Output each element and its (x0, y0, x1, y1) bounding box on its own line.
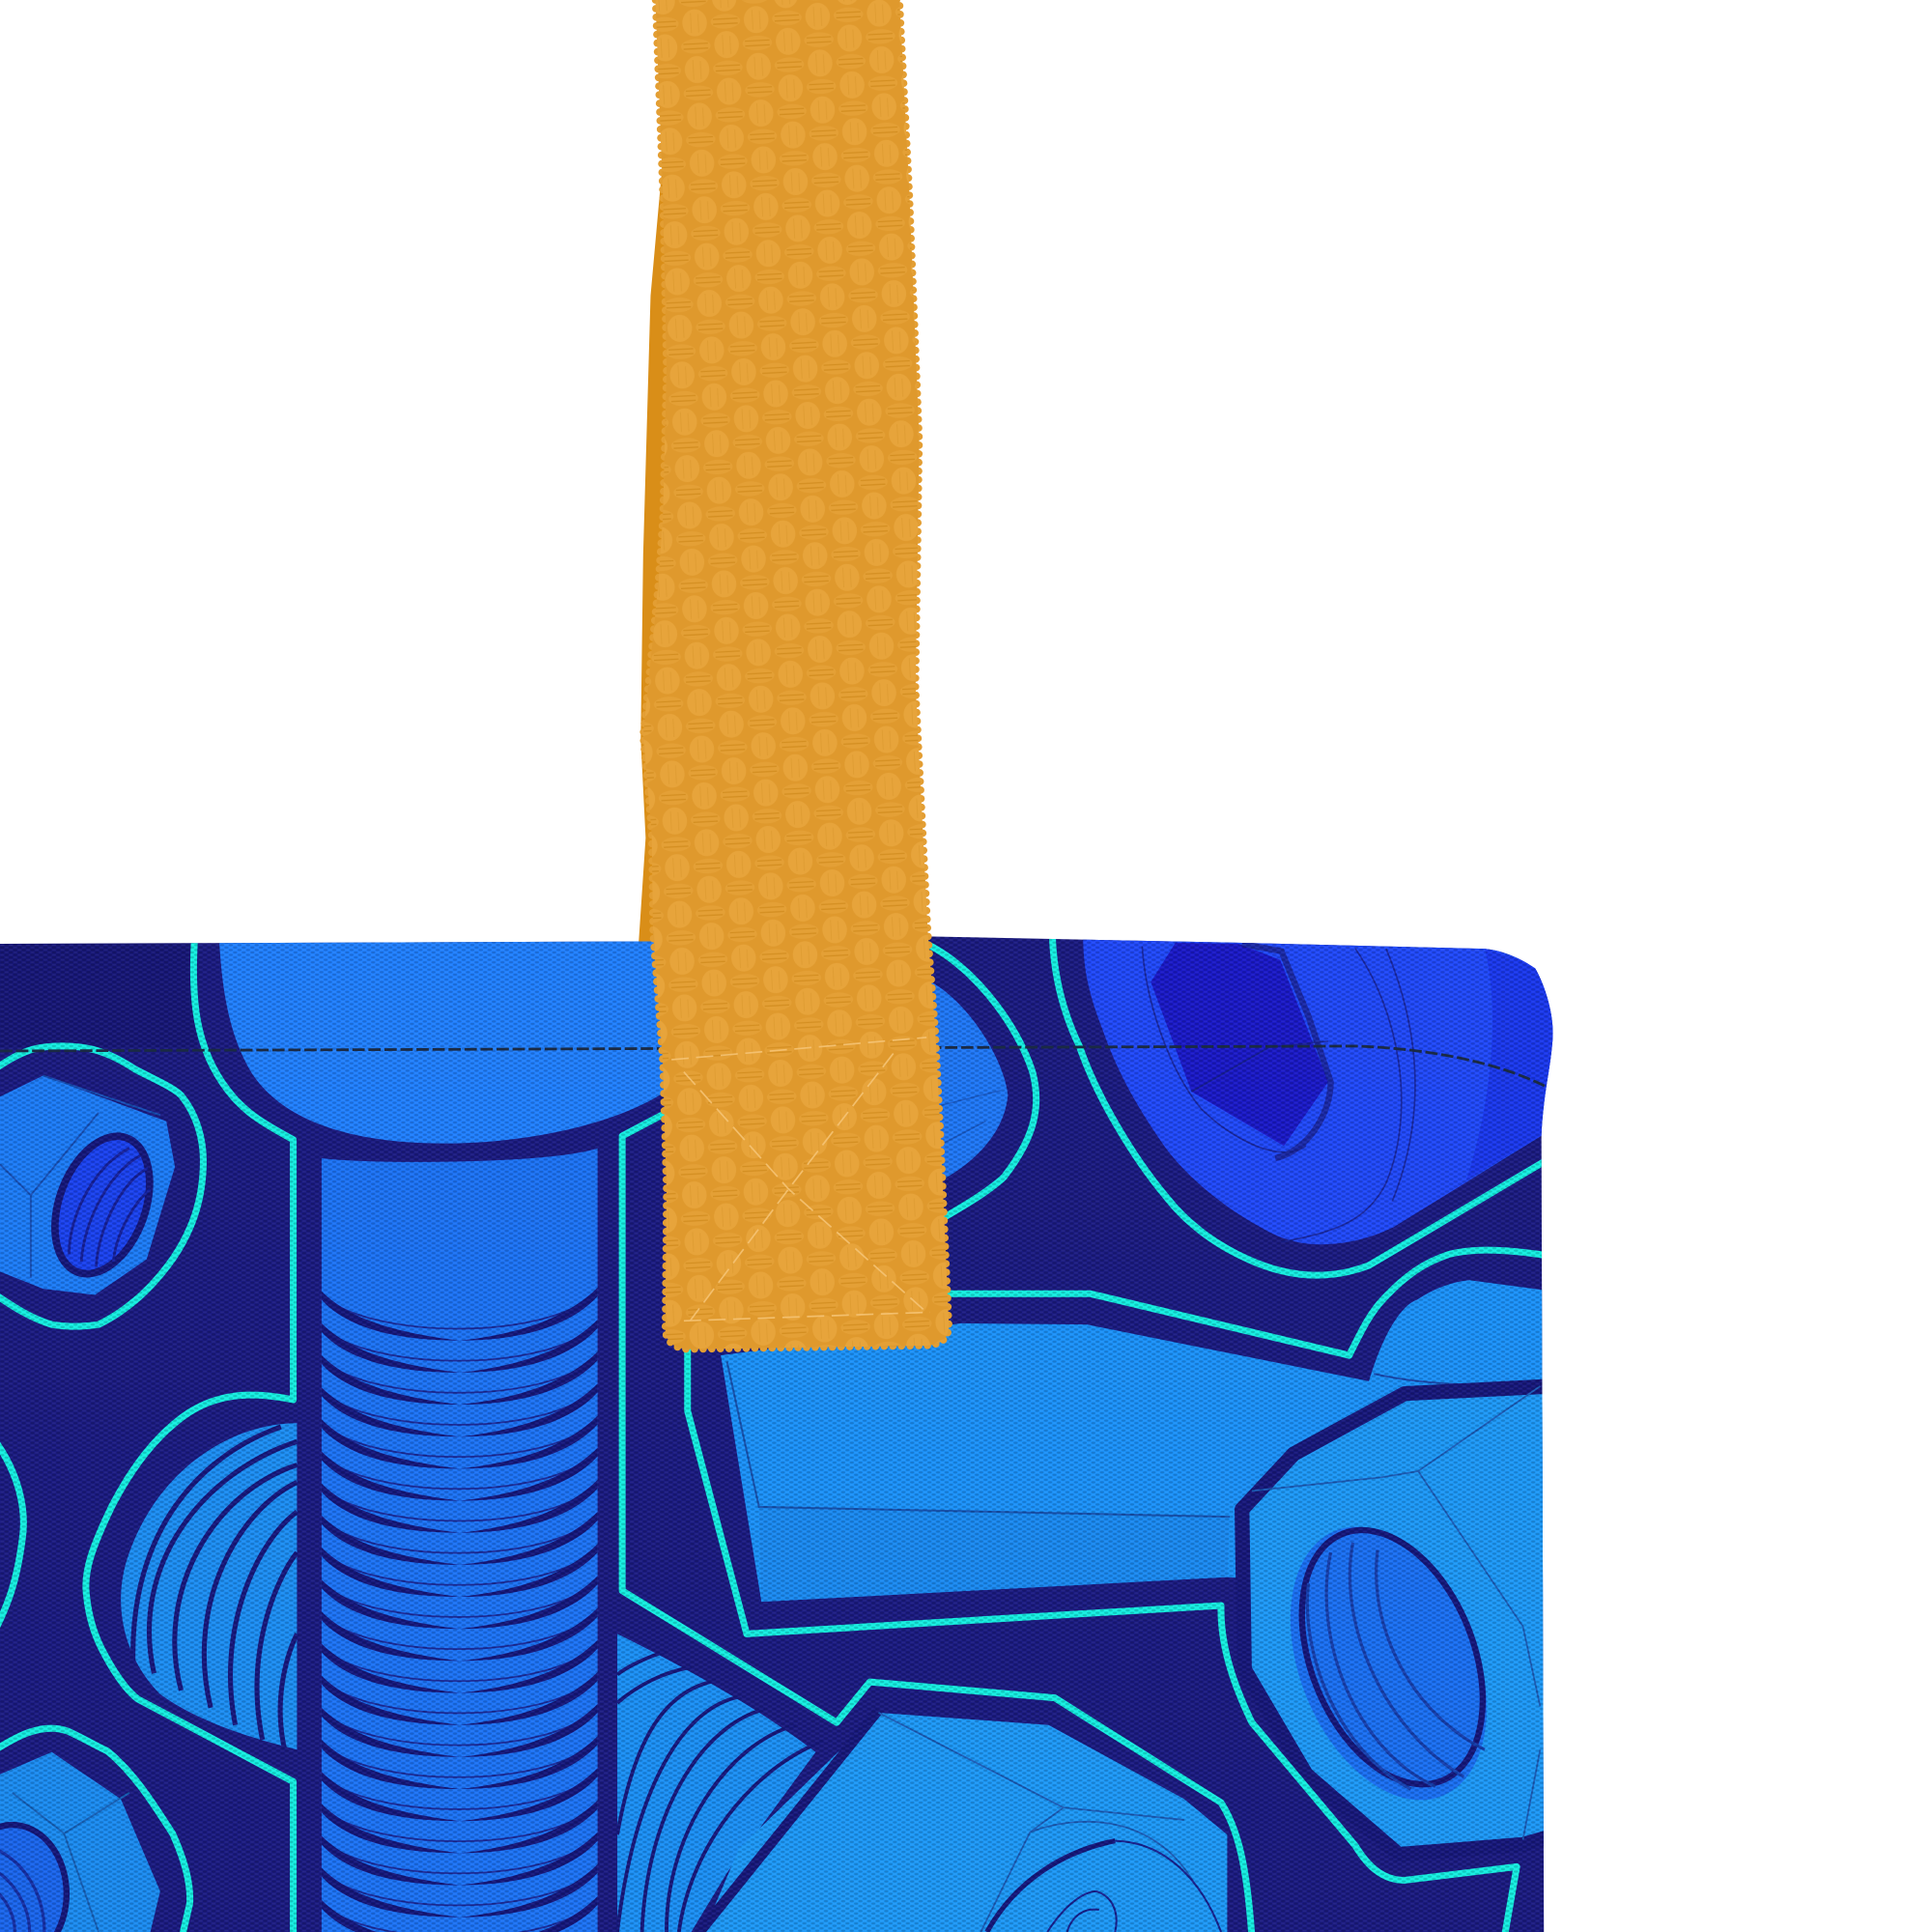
main strap (643, 0, 949, 1350)
large hex nut, right (1242, 1386, 1552, 1855)
left nut (0, 1076, 175, 1295)
back strap layer (639, 173, 690, 949)
lower hex nut (699, 1710, 1227, 1932)
bolt head (219, 941, 666, 1144)
strap stitching (671, 1037, 930, 1321)
left threaded bolt fragment (121, 1423, 297, 1749)
nut behind strap (931, 983, 1009, 1179)
navy fabric base (0, 924, 1565, 1932)
bottom-left nut (0, 1752, 160, 1932)
threaded bolt fragment, centre (617, 1634, 823, 1932)
top hem stitching (0, 1046, 1547, 1087)
bag body (0, 924, 1565, 1932)
big washer and hex socket, top right (1083, 934, 1565, 1244)
darker hem band (0, 943, 197, 1047)
hex bolt head, light blue (721, 1280, 1552, 1602)
bolt shaft with threads (322, 1149, 598, 1932)
weave texture overlay (0, 924, 1565, 1932)
cyan outlines (0, 934, 1550, 1932)
